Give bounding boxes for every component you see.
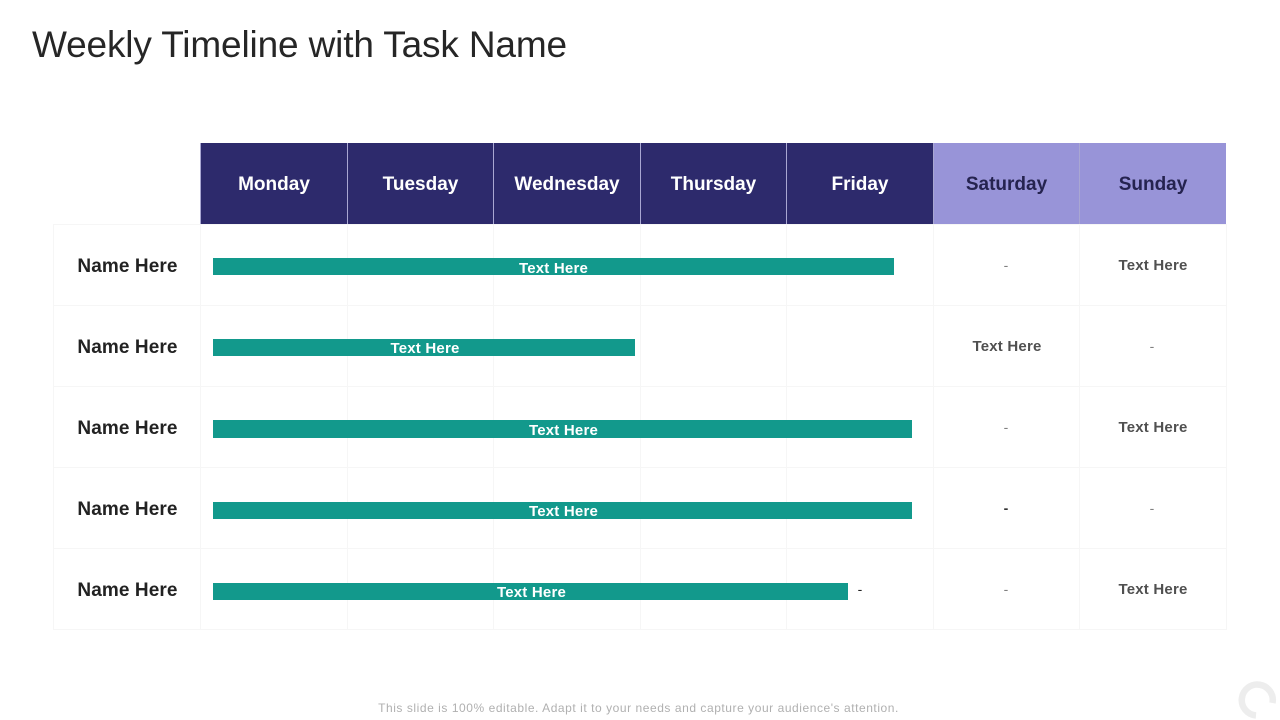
- header: Monday: Monday: [238, 174, 310, 195]
- row 5 task bar: [213, 583, 848, 600]
- header divider backing: [200, 143, 1226, 224]
- row 5 sunday: Text Here: [1118, 581, 1188, 598]
- row 1 sunday: Text Here: [1118, 257, 1188, 274]
- row 2 task bar: Text Here: [390, 340, 460, 357]
- header: Wednesday: Wednesday: [514, 174, 620, 195]
- row 5 saturday: -: [1004, 581, 1008, 597]
- row 1 task bar: [213, 258, 894, 275]
- row 5 name: Name Here: [77, 580, 178, 601]
- header: Thursday: [641, 143, 786, 224]
- row 4 name: Name Here: [77, 499, 178, 520]
- row 2 task bar: [213, 339, 635, 356]
- header: Sunday: Sunday: [1119, 174, 1187, 195]
- row 1 name: Name Here: [77, 256, 178, 277]
- header: Thursday: Thursday: [671, 174, 756, 195]
- header: Tuesday: [348, 143, 493, 224]
- row 3 task bar: [213, 420, 912, 438]
- row 4 saturday: -: [1004, 500, 1008, 516]
- row 3 name: Name Here: [77, 418, 178, 439]
- row 5 friday dash: -: [858, 581, 862, 597]
- row 3 saturday: -: [1004, 419, 1008, 435]
- row 5 task bar: Text Here: [497, 584, 566, 601]
- row 4 task bar: Text Here: [529, 503, 598, 520]
- row 2 sunday: -: [1150, 338, 1154, 354]
- header: Sunday: [1080, 143, 1226, 224]
- icon: loading ring logo: [1238, 682, 1276, 718]
- header: Wednesday: [494, 143, 640, 224]
- row 3 task bar: Text Here: [529, 422, 598, 439]
- header: Tuesday: Tuesday: [383, 174, 458, 195]
- row 2 saturday: Text Here: [972, 338, 1042, 355]
- header: Friday: [787, 143, 933, 224]
- header: Friday: Friday: [831, 174, 889, 195]
- row 3 sunday: Text Here: [1118, 419, 1188, 436]
- row 1 task bar: Text Here: [519, 260, 588, 277]
- row 4 sunday: -: [1150, 500, 1154, 516]
- header: Monday: [201, 143, 347, 224]
- title: Weekly Timeline with Task Name: [32, 24, 567, 65]
- header: Saturday: Saturday: [966, 174, 1047, 195]
- header: Saturday: [934, 143, 1079, 224]
- footer note: This slide is 100% editable. Adapt it to your needs and capture your audience's attention.: [378, 701, 899, 715]
- row 1 saturday: -: [1004, 257, 1008, 273]
- row 2 name: Name Here: [77, 337, 178, 358]
- row 4 task bar: [213, 502, 912, 519]
